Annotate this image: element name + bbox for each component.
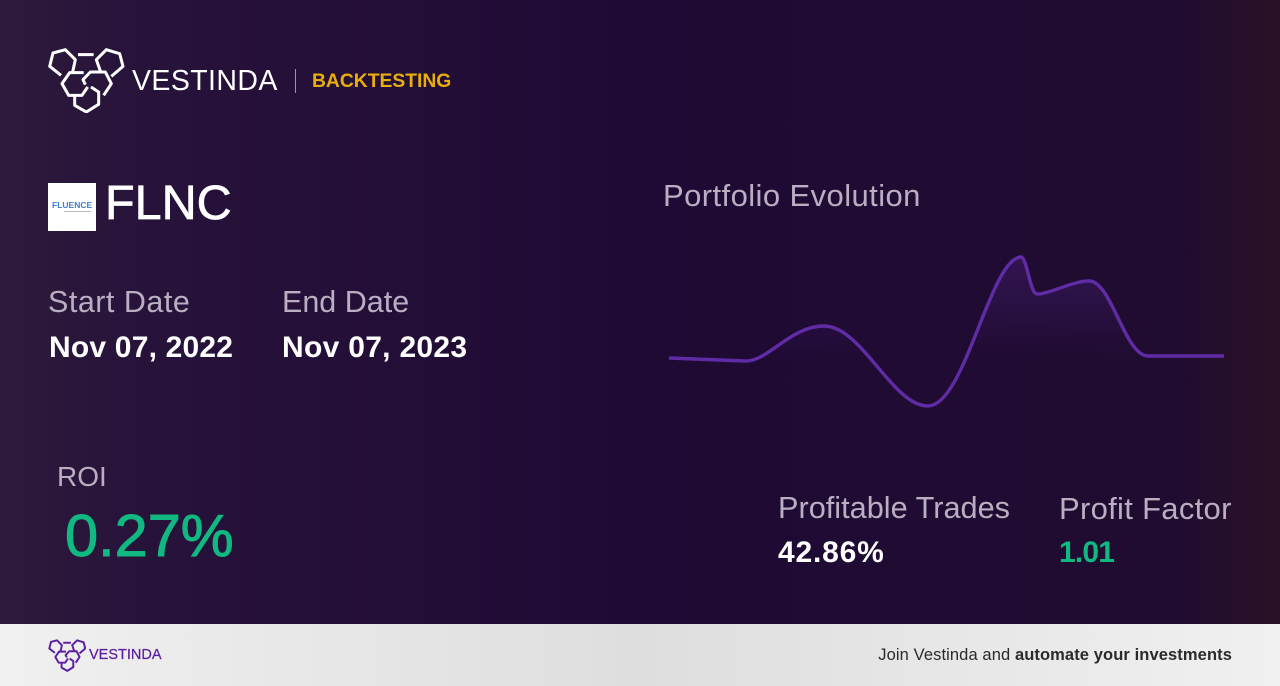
start date label: Start Date <box>48 285 190 319</box>
start date block <box>48 285 233 364</box>
footer wordmark: VESTINDA <box>89 647 162 663</box>
ROI label: ROI <box>57 461 107 492</box>
profitable trades value: 42.86% <box>778 536 885 569</box>
label: backtesting: BACKTESTING <box>312 71 451 92</box>
chart heading: Portfolio Evolution <box>663 178 921 213</box>
ticker symbol: FLNC <box>105 176 232 230</box>
end date block <box>282 285 467 364</box>
profit factor value: 1.01 <box>1059 536 1114 569</box>
end date label: End Date <box>282 285 409 319</box>
line chart: portfolio evolution <box>668 255 1224 408</box>
start date value: Nov 07, 2022 <box>49 331 233 364</box>
icon: Fluence logo: FLUENCE <box>52 200 92 210</box>
profit factor metric <box>1059 491 1232 569</box>
icon: footer Vestinda logo <box>48 639 86 672</box>
profitable trades metric <box>778 490 1010 569</box>
profit factor label: Profit Factor <box>1059 491 1232 526</box>
logo wordmark: VESTINDA <box>132 65 278 97</box>
footer bar <box>0 624 1280 686</box>
footer call to action: Join Vestinda and automate your investments <box>878 646 1232 664</box>
divider <box>295 69 296 93</box>
icon: Vestinda hexagon logo <box>48 48 124 113</box>
ROI metric <box>57 461 234 569</box>
header logo and label <box>48 48 451 113</box>
ticker header <box>48 176 232 231</box>
icon: Fluence logo <box>48 183 96 231</box>
profitable trades label: Profitable Trades <box>778 490 1010 525</box>
end date value: Nov 07, 2023 <box>282 331 467 364</box>
ROI value: 0.27% <box>65 502 234 569</box>
